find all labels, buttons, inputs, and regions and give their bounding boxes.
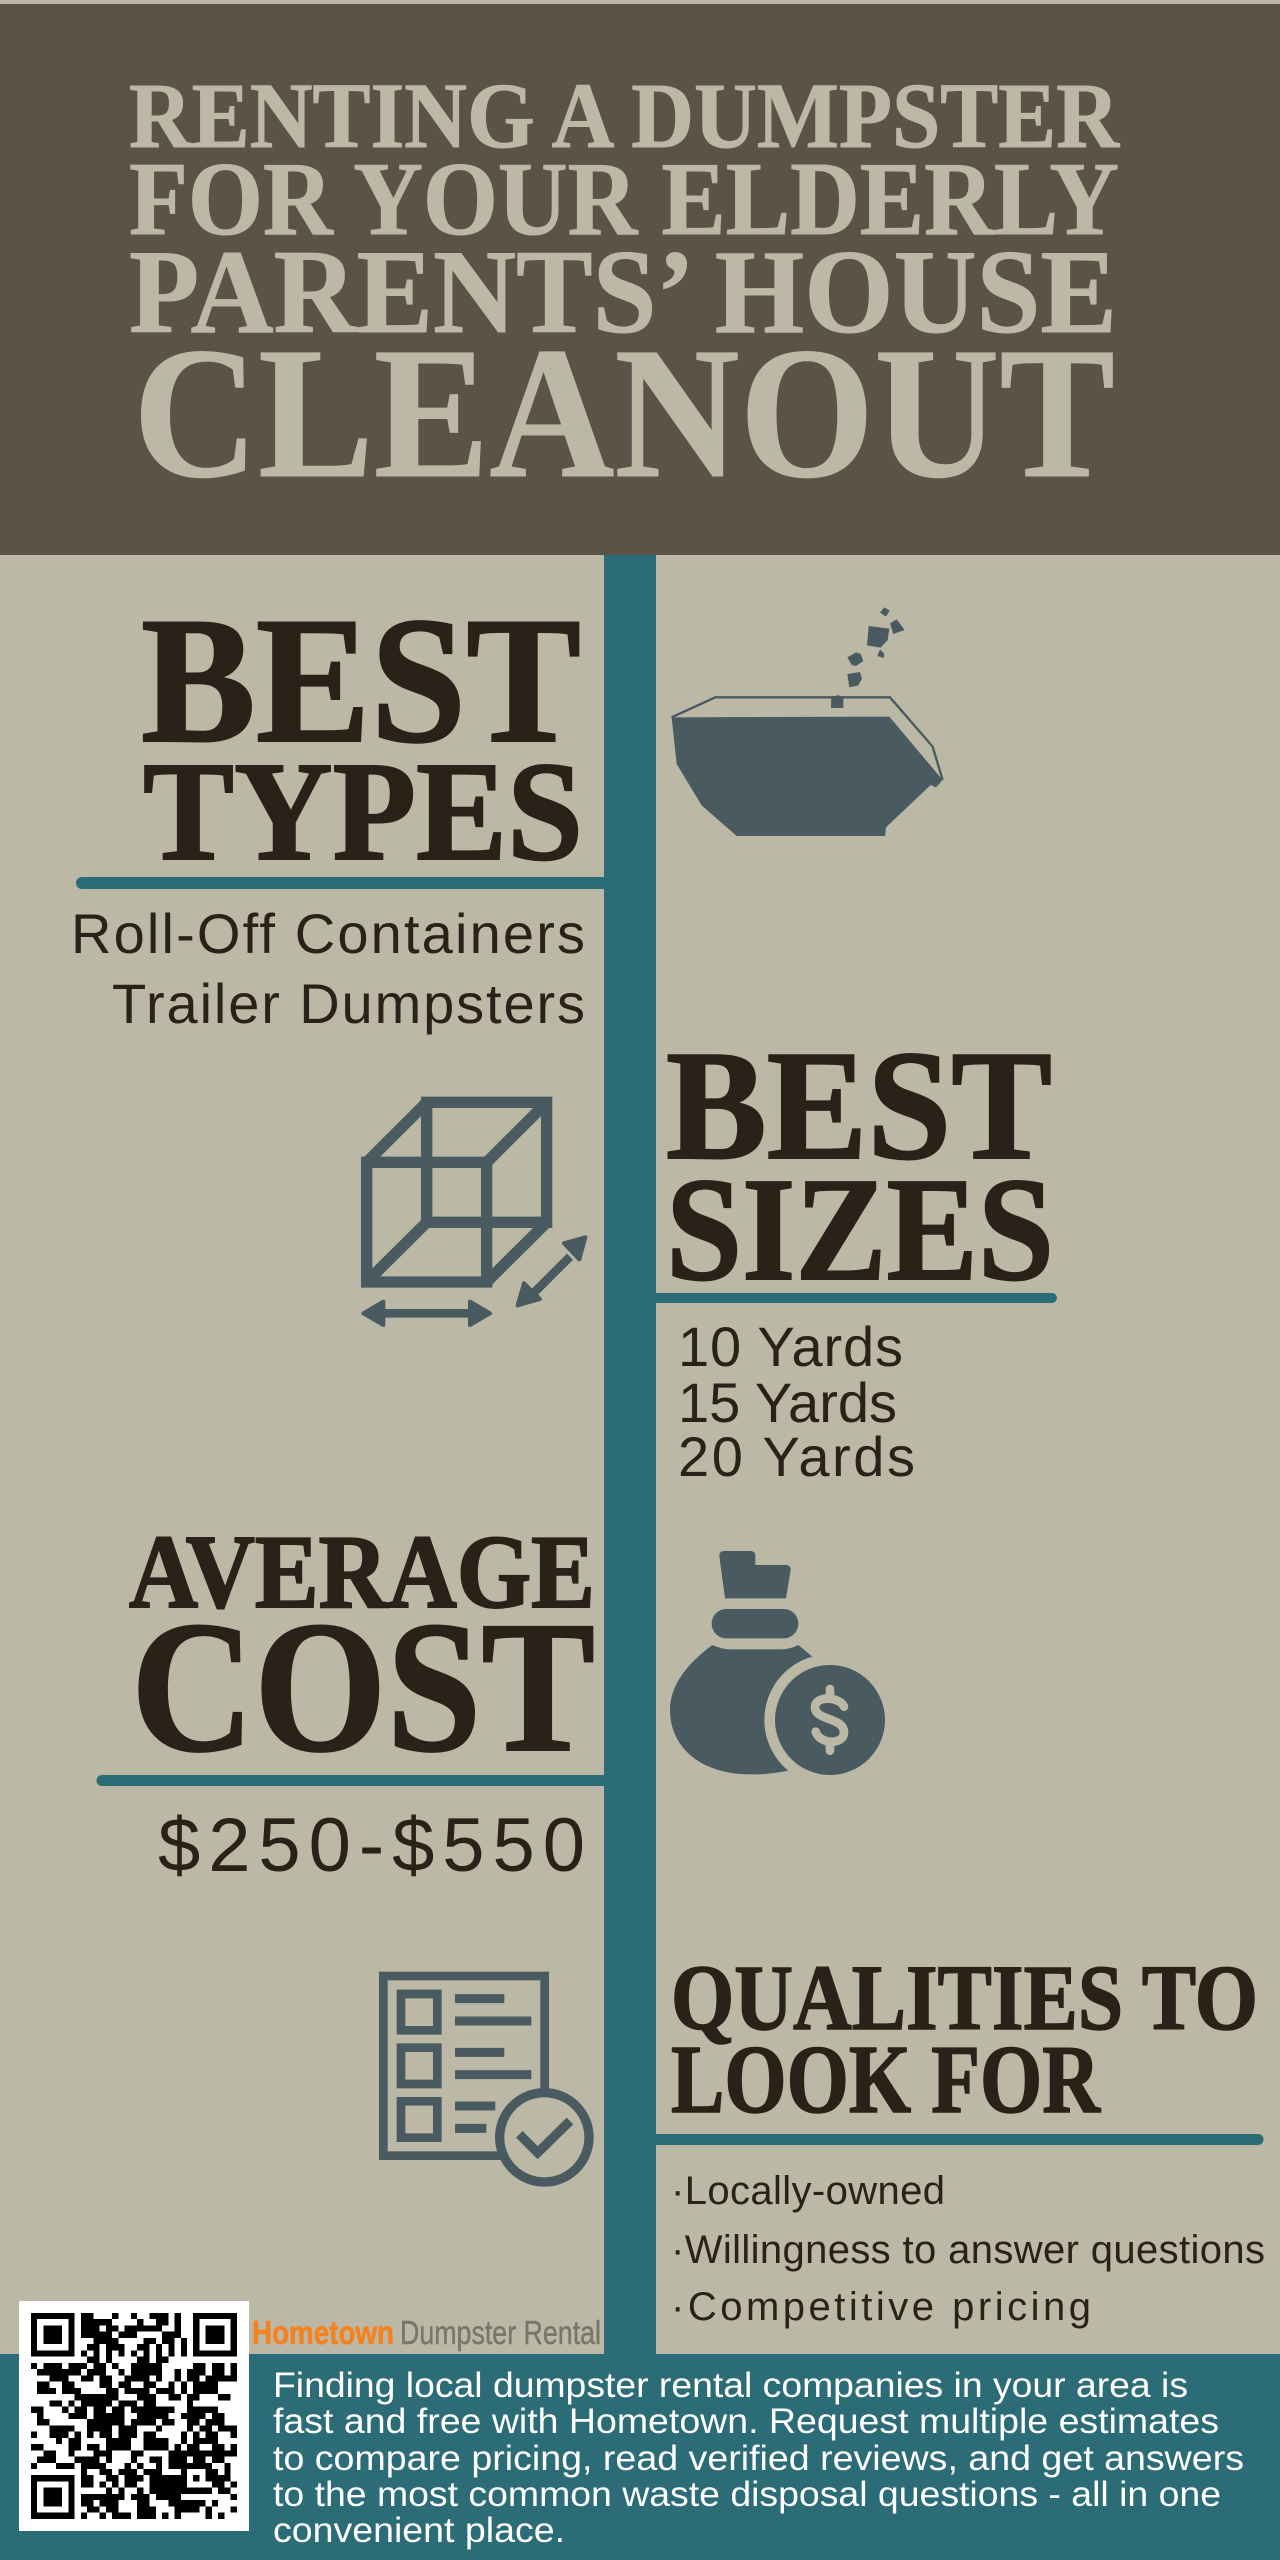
list: qualities: ·Willingness to answer questions [671,2228,1265,2272]
heading: average cost [129,1513,595,1791]
list: types [71,902,585,1035]
title text: FOR YOUR ELDERLY [129,140,1119,257]
footer band [0,2354,1280,2560]
heading: qualities: LOOK FOR [671,2026,1101,2133]
heading: best types: BEST [141,581,581,781]
section: qualities to look for [656,1947,1265,2329]
section: best sizes [656,1018,1057,1488]
logo: Hometown Dumpster Rental: Hometown [252,2314,394,2351]
central vertical bar [604,555,656,2355]
divider [76,877,604,889]
list: sizes: 20 Yards [678,1425,915,1488]
list: types: Trailer Dumpsters [112,972,585,1035]
title banner [0,4,1280,555]
cost value: $250-$550 [158,1803,585,1888]
logo: Hometown Dumpster Rental [252,2314,601,2351]
footer text [273,2366,1244,2550]
icon: cube with size arrows [363,1102,585,1325]
icon: dumpster [672,607,943,836]
title text: CLEANOUT [133,308,1115,517]
icon: checklist [383,1976,589,2182]
list: sizes: 15 Yards [678,1371,897,1434]
section: average cost [97,1513,604,1888]
heading: qualities [671,1947,1258,2133]
list: qualities: ·Locally-owned [671,2169,945,2213]
heading: average cost: AVERAGE [129,1513,595,1630]
heading: best types: TYPES [143,732,583,890]
footer text: convenient place. [273,2511,565,2550]
heading: best types [141,581,583,890]
section: best types [71,581,604,1035]
list: qualities: ·Competitive pricing [671,2285,1091,2329]
list: qualities [671,2169,1265,2329]
heading: best sizes: SIZES [666,1148,1054,1312]
heading: best sizes [666,1018,1054,1312]
icon: money bag with dollar coin [670,1551,885,1775]
title text [129,65,1120,517]
title text: RENTING A DUMPSTER [129,65,1120,168]
list: types: Roll-Off Containers [71,902,585,965]
footer text: fast and free with Hometown. Request multiple estimates [273,2402,1219,2441]
logo: Hometown Dumpster Rental: Dumpster Rental [400,2314,601,2351]
QR code [19,2301,249,2531]
footer text: Finding local dumpster rental companies in your area is [273,2366,1188,2405]
heading: best sizes: BEST [666,1018,1052,1192]
divider [656,1293,1057,1303]
list: sizes: 10 Yards [678,1315,903,1378]
footer text: to compare pricing, read verified reviews, and get answers [273,2439,1244,2478]
divider [656,2134,1264,2145]
list: sizes [678,1315,915,1488]
footer text: to the most common waste disposal questions - all in one [273,2475,1221,2514]
title text: PARENTS’ HOUSE [129,225,1117,358]
heading: average cost: COST [131,1582,595,1791]
divider [97,1775,604,1786]
